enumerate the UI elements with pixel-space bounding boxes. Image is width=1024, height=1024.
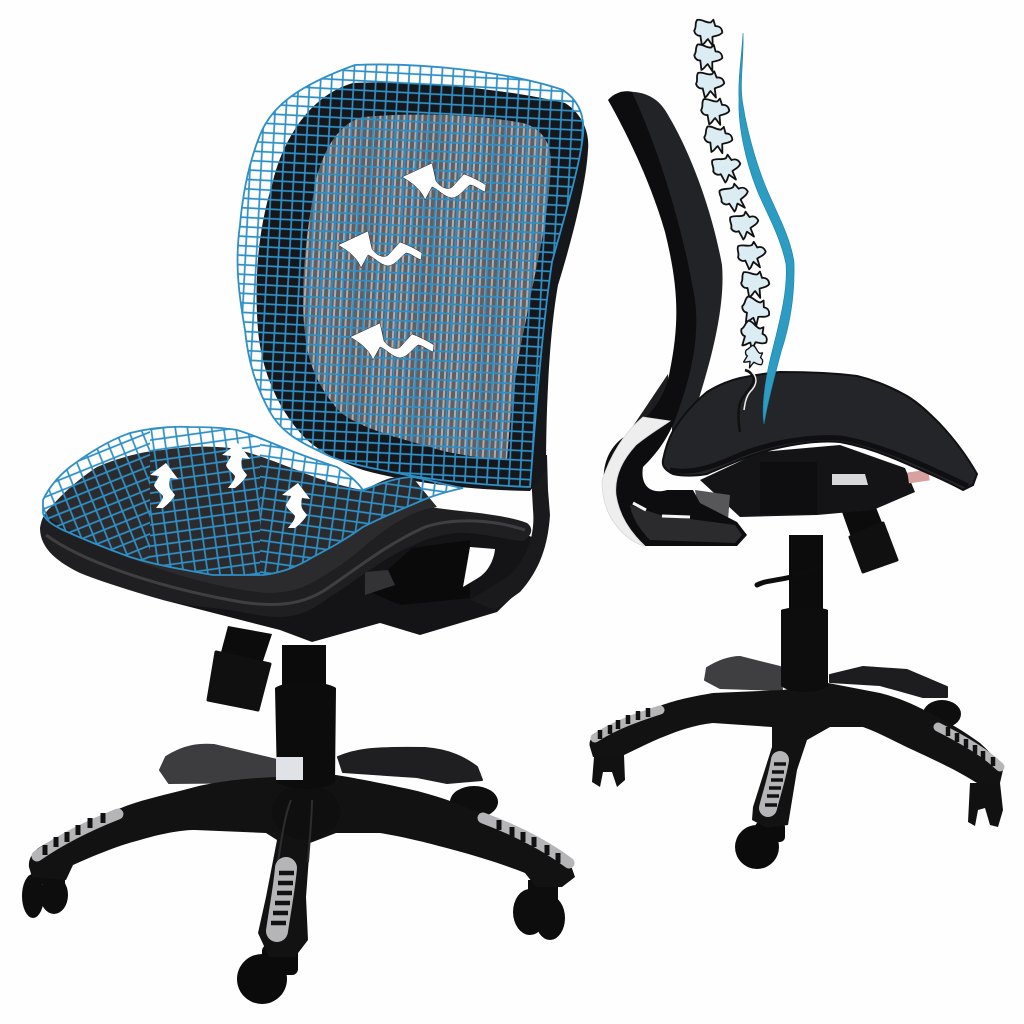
left chair under-seat mechanism	[163, 455, 550, 642]
sacrum	[738, 370, 754, 432]
left chair seat	[30, 420, 531, 617]
backrest mesh side	[620, 92, 723, 438]
backrest airflow arrow 2	[338, 231, 422, 268]
right silver plate	[938, 727, 1000, 767]
spine illustration	[692, 17, 774, 432]
rear caster	[450, 786, 498, 818]
right chair backrest and frame	[602, 91, 747, 546]
height lever	[757, 566, 820, 585]
front silver plate	[765, 760, 786, 808]
white trim strip	[602, 417, 670, 546]
left caster	[22, 872, 68, 918]
seat rim highlight	[46, 521, 525, 605]
vertebra stack	[692, 17, 724, 48]
backrest airflow arrow 1	[402, 163, 486, 200]
front caster	[735, 822, 785, 869]
hub	[272, 784, 340, 840]
rear caster	[923, 700, 961, 728]
frame inner strut shading	[630, 505, 742, 543]
seat blue grid overlay	[44, 428, 459, 574]
blue lumbar support curve	[739, 33, 794, 424]
seat airflow arrow 2	[222, 443, 250, 488]
left chair star base	[22, 745, 575, 1004]
left silver plate	[595, 708, 660, 739]
front silver plate	[271, 868, 294, 931]
upright bracket	[470, 455, 550, 610]
left chair: front three-quarter view	[22, 64, 588, 1004]
left silver plate	[37, 813, 118, 856]
right caster	[513, 880, 565, 940]
right chair: side view	[589, 17, 1003, 869]
left chair backrest	[238, 64, 588, 491]
backrest mesh panel	[303, 115, 551, 460]
frame slots	[633, 503, 690, 517]
backrest airflow arrow 3	[350, 323, 434, 360]
left chair gas cylinder	[275, 645, 336, 789]
bracket opening	[463, 547, 495, 587]
seat grid outline	[43, 427, 463, 575]
hub grooves	[278, 800, 312, 862]
right silver plate	[483, 818, 569, 863]
seat airflow arrow 3	[282, 483, 310, 528]
seat underside edge	[670, 438, 968, 486]
seat rim	[40, 505, 531, 617]
star arms	[589, 683, 1003, 828]
warning sticker	[907, 470, 930, 483]
backrest blue grid overlay	[238, 64, 583, 487]
seat airflow arrow 1	[150, 463, 178, 508]
right chair tilt knob	[842, 505, 897, 572]
front caster	[237, 945, 298, 1004]
right chair seat mechanism	[695, 445, 930, 520]
right chair seat cushion	[663, 372, 977, 490]
star arms	[29, 775, 575, 957]
right chair gas cylinder	[757, 535, 828, 692]
left caster	[592, 755, 625, 787]
cylinder label	[276, 757, 303, 780]
right caster	[968, 783, 1003, 827]
side strut	[627, 374, 670, 445]
right chair star base	[589, 657, 1003, 869]
frame	[604, 91, 747, 546]
backrest frame	[257, 82, 588, 491]
seat mesh	[47, 447, 437, 593]
left chair tilt knob	[208, 626, 272, 710]
